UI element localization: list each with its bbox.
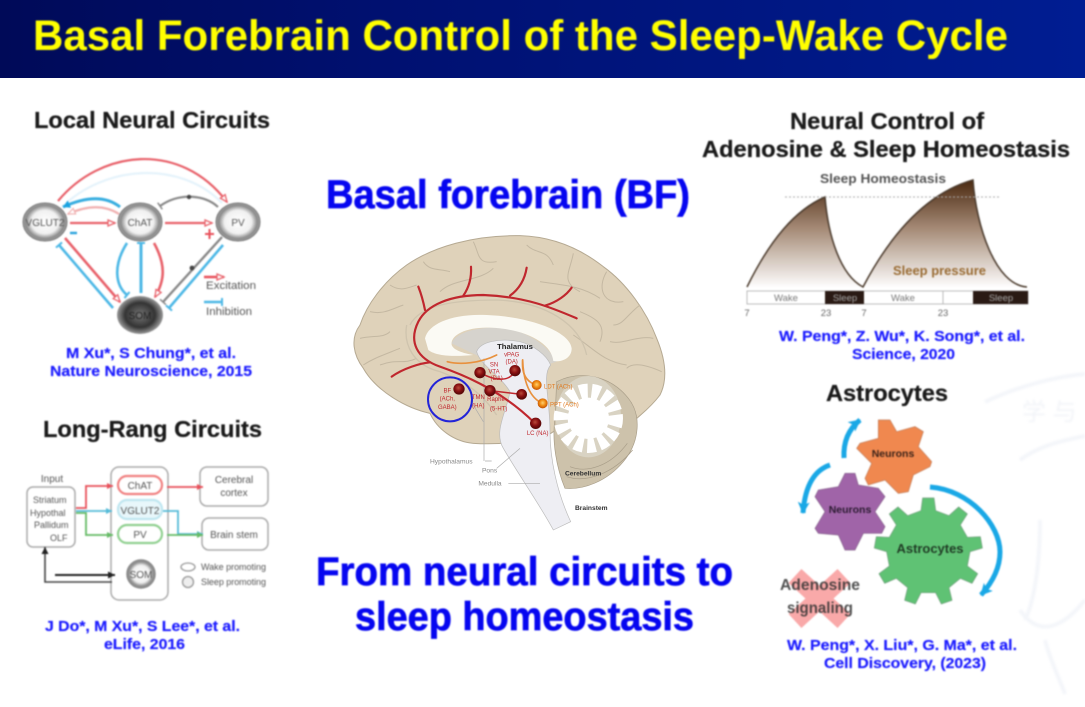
- citation: Cell Discovery: W. Peng*, X. Liu*, G. Ma*, et al.: [787, 637, 1017, 654]
- nucleus labels: (5-HT): [490, 406, 507, 412]
- nucleus labels: PPT (ACh): [550, 403, 579, 409]
- citation: Cell Discovery: [787, 637, 1017, 672]
- basal forebrain cell-type box: [111, 467, 168, 600]
- chart label: sleep pressure: Sleep pressure: [893, 264, 986, 278]
- region labels: hypothalamus, pons, medulla: Pons: [482, 467, 498, 474]
- nucleus labels: Raphe: [487, 397, 505, 403]
- legend: wake and sleep promoting: [181, 562, 266, 588]
- citation: Cell Discovery: Cell Discovery, (2023): [824, 655, 986, 672]
- node: ChAT: ChAT: [128, 218, 152, 229]
- panel: adenosine and sleep homeostasis: [702, 108, 1070, 363]
- output box: cerebral cortex: Cerebral: [215, 475, 253, 486]
- chart label: sleep homeostasis: Sleep Homeostasis: [820, 172, 946, 186]
- input box: OLF: [50, 533, 68, 543]
- cerebellum: [554, 376, 637, 489]
- input box: Hypothal: [30, 508, 66, 518]
- cortical sulci: [360, 242, 662, 415]
- nucleus labels: (DA): [491, 376, 503, 382]
- cycle arrows: [803, 420, 1000, 595]
- red projection pathways: [392, 267, 577, 423]
- timeline hour labels: 23: [938, 308, 948, 319]
- timeline bar: wake and sleep: [747, 291, 1028, 304]
- region label: thalamus: Thalamus: [497, 342, 533, 351]
- heading: neural control of adenosine: Adenosine & Sleep Homeostasis: [702, 136, 1070, 162]
- nucleus labels: SN: [490, 363, 498, 369]
- gear: green astrocytes: [874, 498, 982, 604]
- nucleus labels: GABA): [438, 405, 457, 411]
- nucleus labels: LDT (ACh): [544, 384, 572, 390]
- legend: excitation and inhibition: Inhibition: [206, 306, 252, 318]
- node: VGLUT2: [23, 203, 67, 241]
- node: VGLUT2: VGLUT2: [26, 218, 65, 229]
- timeline hour labels: 23: [821, 308, 831, 319]
- heading: neural control of adenosine: [702, 108, 1070, 162]
- node: SOM: [117, 296, 163, 334]
- region labels: hypothalamus, pons, medulla: Medulla: [478, 480, 502, 487]
- output box: brain stem: [202, 518, 268, 550]
- caption: from neural circuits to sleep homeostasis: sleep homeostasis: [355, 595, 694, 639]
- thalamus region: [452, 328, 557, 372]
- input box: Pallidum: [34, 520, 69, 530]
- gear: purple neurons: [815, 473, 885, 550]
- heading: local neural circuits: Local Neural Circuits: [34, 107, 270, 133]
- nucleus labels: BF: [444, 388, 451, 394]
- citation: Nature Neuroscience: M Xu*, S Chung*, et al.: [66, 345, 236, 362]
- gear: green astrocytes: Astrocytes: [896, 541, 964, 556]
- input box: Input: [41, 474, 63, 485]
- legend: excitation and inhibition: [204, 277, 256, 318]
- gear: purple neurons: Neurons: [829, 504, 871, 516]
- blocked adenosine signaling: signaling: [787, 600, 853, 617]
- output box: cerebral cortex: cortex: [220, 488, 248, 499]
- node: SOM: SOM: [129, 311, 151, 322]
- citation: Nature Neuroscience: Nature Neuroscience, 2015: [50, 363, 252, 380]
- nucleus labels: [438, 353, 579, 437]
- header banner: [0, 0, 1085, 78]
- citation: Science: [779, 328, 1025, 363]
- citation: Science: W. Peng*, Z. Wu*, K. Song*, et al.: [779, 328, 1025, 345]
- basal forebrain cell-type box: ChAT: [128, 481, 152, 492]
- nucleus labels: LC (NA): [527, 431, 548, 437]
- node: PV: [216, 203, 260, 241]
- gear: orange neurons: [857, 420, 932, 493]
- citation: eLife: eLife, 2016: [104, 636, 185, 653]
- nucleus labels: TMN: [472, 395, 485, 401]
- citation: eLife: J Do*, M Xu*, S Lee*, et al.: [45, 618, 240, 635]
- heading: astrocytes: Astrocytes: [826, 380, 948, 406]
- timeline hour labels: 7: [744, 308, 750, 319]
- orange projection pathways: [447, 355, 543, 403]
- basal forebrain cell-type box: PV: [133, 530, 147, 541]
- legend: wake and sleep promoting: Sleep promoting: [201, 577, 266, 587]
- nucleus labels: (HA): [472, 404, 484, 410]
- caption: from neural circuits to sleep homeostasis: From neural circuits to: [316, 550, 733, 594]
- timeline bar: wake and sleep: Wake: [891, 293, 915, 304]
- caption: from neural circuits to sleep homeostasis: [316, 550, 733, 639]
- timeline bar: wake and sleep: Sleep: [989, 293, 1013, 304]
- title: Basal Forebrain Control of the Sleep-Wake Cycle: [33, 12, 1008, 60]
- heading: neural control of adenosine: Neural Control of: [790, 108, 984, 134]
- cerebrum: [354, 236, 665, 444]
- corpus callosum: [425, 315, 572, 361]
- nucleus labels: (DA): [506, 359, 518, 365]
- citation: eLife: [45, 618, 240, 653]
- leader lines: [473, 358, 540, 483]
- region labels: hypothalamus, pons, medulla: Hypothalamus: [430, 458, 473, 465]
- gear: orange neurons: Neurons: [872, 448, 914, 460]
- nucleus labels: VTA: [488, 369, 500, 375]
- brain illustration: [354, 236, 665, 530]
- nucleus labels: (ACh,: [440, 396, 455, 402]
- node: PV: PV: [231, 218, 245, 229]
- basal forebrain cell-type box: SOM: [130, 570, 152, 581]
- timeline hour labels: 7: [861, 308, 867, 319]
- basal forebrain cell-type box: VGLUT2: [121, 506, 160, 517]
- pathway arrows: [45, 486, 203, 582]
- output box: cerebral cortex: [200, 467, 268, 506]
- network diagram: local circuit connections: [58, 159, 227, 308]
- timeline hour labels: [744, 308, 948, 319]
- highlight circle: basal forebrain: [428, 377, 472, 421]
- region label: brainstem: Brainstem: [575, 505, 608, 512]
- watermark: faint university seal: 学 与: [1022, 399, 1077, 426]
- legend: excitation and inhibition: Excitation: [206, 280, 256, 292]
- region label: cerebellum: Cerebellum: [565, 471, 601, 478]
- heading: basal forebrain: Basal forebrain (BF): [326, 173, 690, 217]
- heading: long-range circuits: Long-Rang Circuits: [43, 416, 262, 442]
- blocked adenosine signaling: [780, 576, 860, 621]
- nucleus labels: vPAG: [504, 353, 520, 359]
- timeline bar: wake and sleep: Sleep: [833, 293, 857, 304]
- legend: wake and sleep promoting: Wake promoting: [201, 562, 266, 572]
- brainstem: [477, 340, 571, 530]
- node: ChAT: [118, 203, 162, 241]
- watermark: faint university seal: [985, 374, 1085, 694]
- input box: [27, 474, 75, 547]
- output box: brain stem: Brain stem: [210, 530, 258, 541]
- blocked adenosine signaling: Adenosine: [780, 577, 860, 594]
- panel: long-range circuits: [27, 416, 268, 653]
- chart: sleep pressure curve: [747, 180, 1027, 287]
- input box: Striatum: [33, 495, 67, 505]
- nuclei: [453, 365, 548, 429]
- citation: Nature Neuroscience: [50, 345, 252, 380]
- panel: local neural circuits: [23, 107, 270, 380]
- region labels: hypothalamus, pons, medulla: [430, 458, 502, 487]
- panel: astrocytes: [780, 380, 1017, 672]
- citation: Science: Science, 2020: [852, 346, 955, 363]
- timeline bar: wake and sleep: Wake: [774, 293, 798, 304]
